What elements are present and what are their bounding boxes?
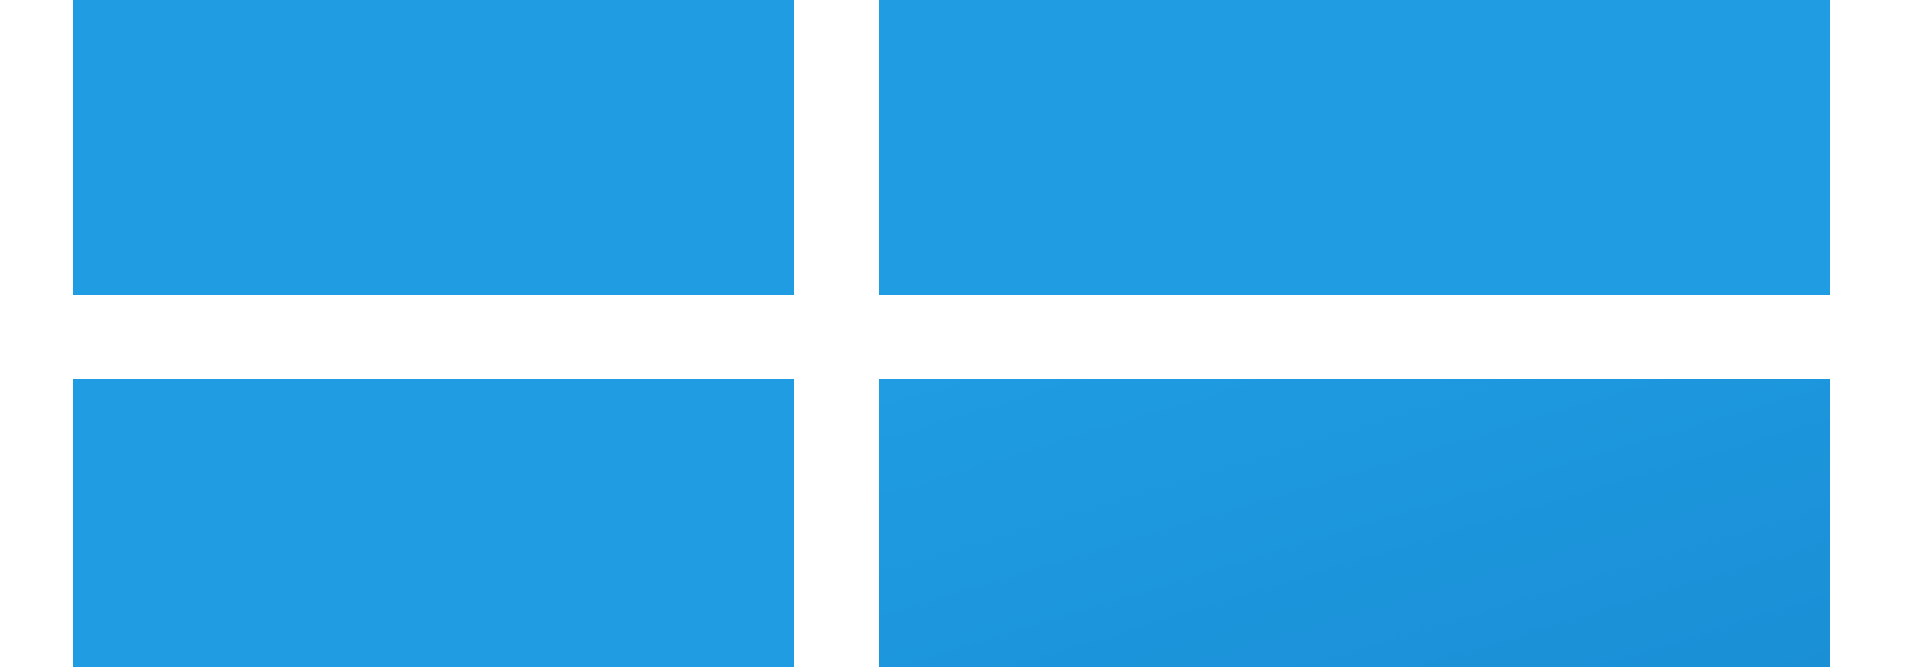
panel: bottom left xyxy=(73,379,794,667)
panel: top left xyxy=(73,0,794,295)
panel: bottom right xyxy=(879,379,1830,667)
panel: top right xyxy=(879,0,1830,295)
